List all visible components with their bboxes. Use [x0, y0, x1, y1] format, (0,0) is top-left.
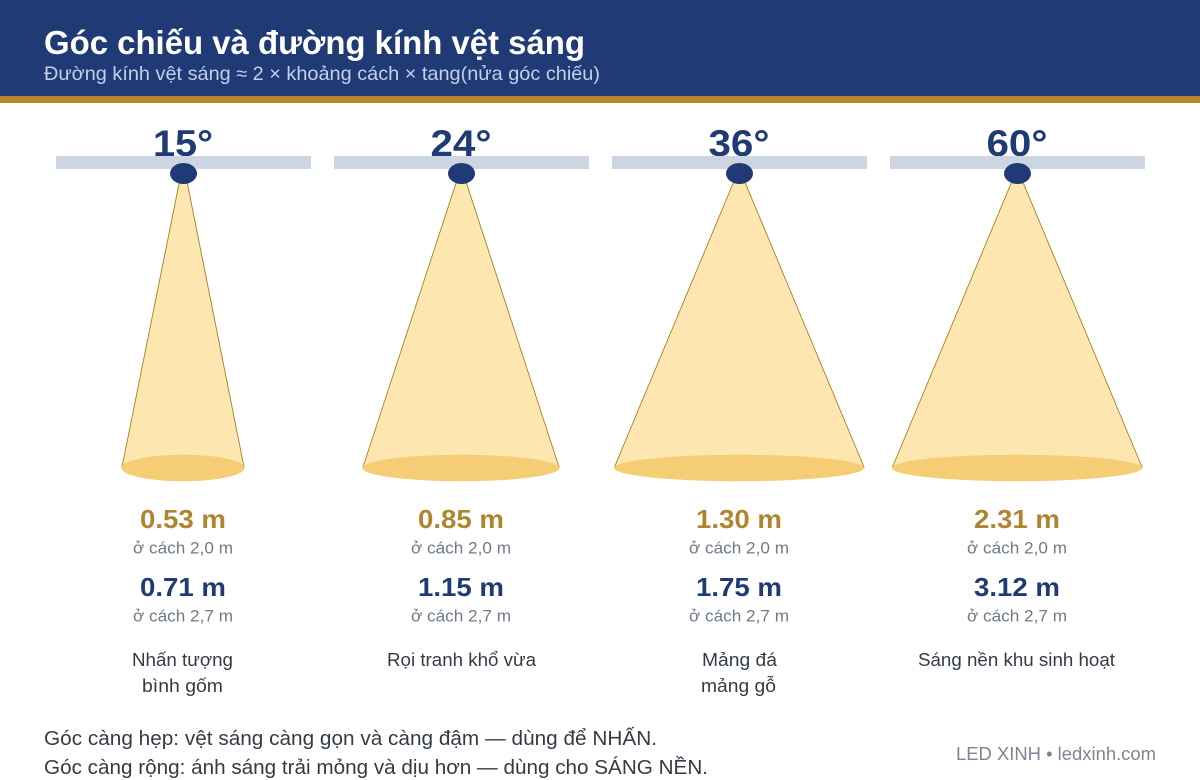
light cone — [892, 174, 1142, 467]
value at 2.0 m: 0.53 m — [140, 504, 226, 534]
use description — [701, 650, 778, 696]
spotlight icon — [170, 163, 197, 184]
angle label 60: 60° — [986, 122, 1048, 164]
panel: 60 degree beam — [890, 122, 1145, 670]
distance 2.7 m: ở cách 2,7 m — [411, 606, 511, 626]
value at 2.0 m: 1.30 m — [696, 504, 782, 534]
angle label 36: 36° — [708, 122, 770, 164]
spotlight icon — [448, 163, 475, 184]
light pool — [362, 455, 560, 481]
spotlight icon — [1004, 163, 1031, 184]
value at 2.7 m: 3.12 m — [974, 572, 1060, 602]
spotlight icon — [726, 163, 753, 184]
ceiling bar — [334, 156, 589, 169]
light cone — [122, 174, 244, 467]
footer takeaway notes: Góc càng rộng: ánh sáng trải mỏng và dịu hơn — dùng cho SÁNG NỀN. — [44, 756, 708, 779]
value at 2.7 m: 1.75 m — [696, 572, 782, 602]
value at 2.0 m: 0.85 m — [418, 504, 504, 534]
distance 2.7 m: ở cách 2,7 m — [689, 606, 789, 626]
value at 2.7 m: 0.71 m — [140, 572, 226, 602]
distance 2.7 m: ở cách 2,7 m — [967, 606, 1067, 626]
use description: Mảng đá — [702, 650, 778, 670]
use description: Nhấn tượng — [132, 650, 233, 670]
panel: 15 degree beam — [56, 122, 311, 696]
light cone — [614, 174, 864, 467]
light pool — [892, 455, 1142, 481]
title: Góc chiếu và đường kính vệt sáng — [44, 25, 585, 62]
angle label 15: 15° — [153, 122, 213, 164]
ceiling bar — [612, 156, 867, 169]
footer takeaway notes — [44, 727, 708, 779]
footer takeaway notes: Góc càng hẹp: vệt sáng càng gọn và càng đậm — dùng để NHẤN. — [44, 727, 657, 750]
header band — [0, 0, 1200, 103]
ceiling bar — [56, 156, 311, 169]
angle label 24: 24° — [430, 122, 492, 164]
distance 2.0 m: ở cách 2,0 m — [133, 538, 233, 558]
value at 2.7 m: 1.15 m — [418, 572, 504, 602]
use description — [132, 650, 233, 696]
ceiling bar — [890, 156, 1145, 169]
use description: Sáng nền khu sinh hoạt — [918, 650, 1115, 670]
distance 2.7 m: ở cách 2,7 m — [133, 606, 233, 626]
subtitle formula: Đường kính vệt sáng ≈ 2 × khoảng cách × tang(nửa góc chiếu) — [44, 63, 600, 85]
value at 2.0 m: 2.31 m — [974, 504, 1060, 534]
use description: Rọi tranh khổ vừa — [387, 650, 537, 670]
distance 2.0 m: ở cách 2,0 m — [411, 538, 511, 558]
distance 2.0 m: ở cách 2,0 m — [967, 538, 1067, 558]
brand credit: LED XINH • ledxinh.com — [956, 744, 1156, 764]
use description: bình gốm — [142, 676, 223, 696]
panel: 24 degree beam — [334, 122, 589, 670]
light pool — [122, 455, 244, 481]
light pool — [614, 455, 864, 481]
distance 2.0 m: ở cách 2,0 m — [689, 538, 789, 558]
use description: mảng gỗ — [701, 675, 776, 696]
panel: 36 degree beam — [612, 122, 867, 696]
light cone — [363, 174, 559, 467]
